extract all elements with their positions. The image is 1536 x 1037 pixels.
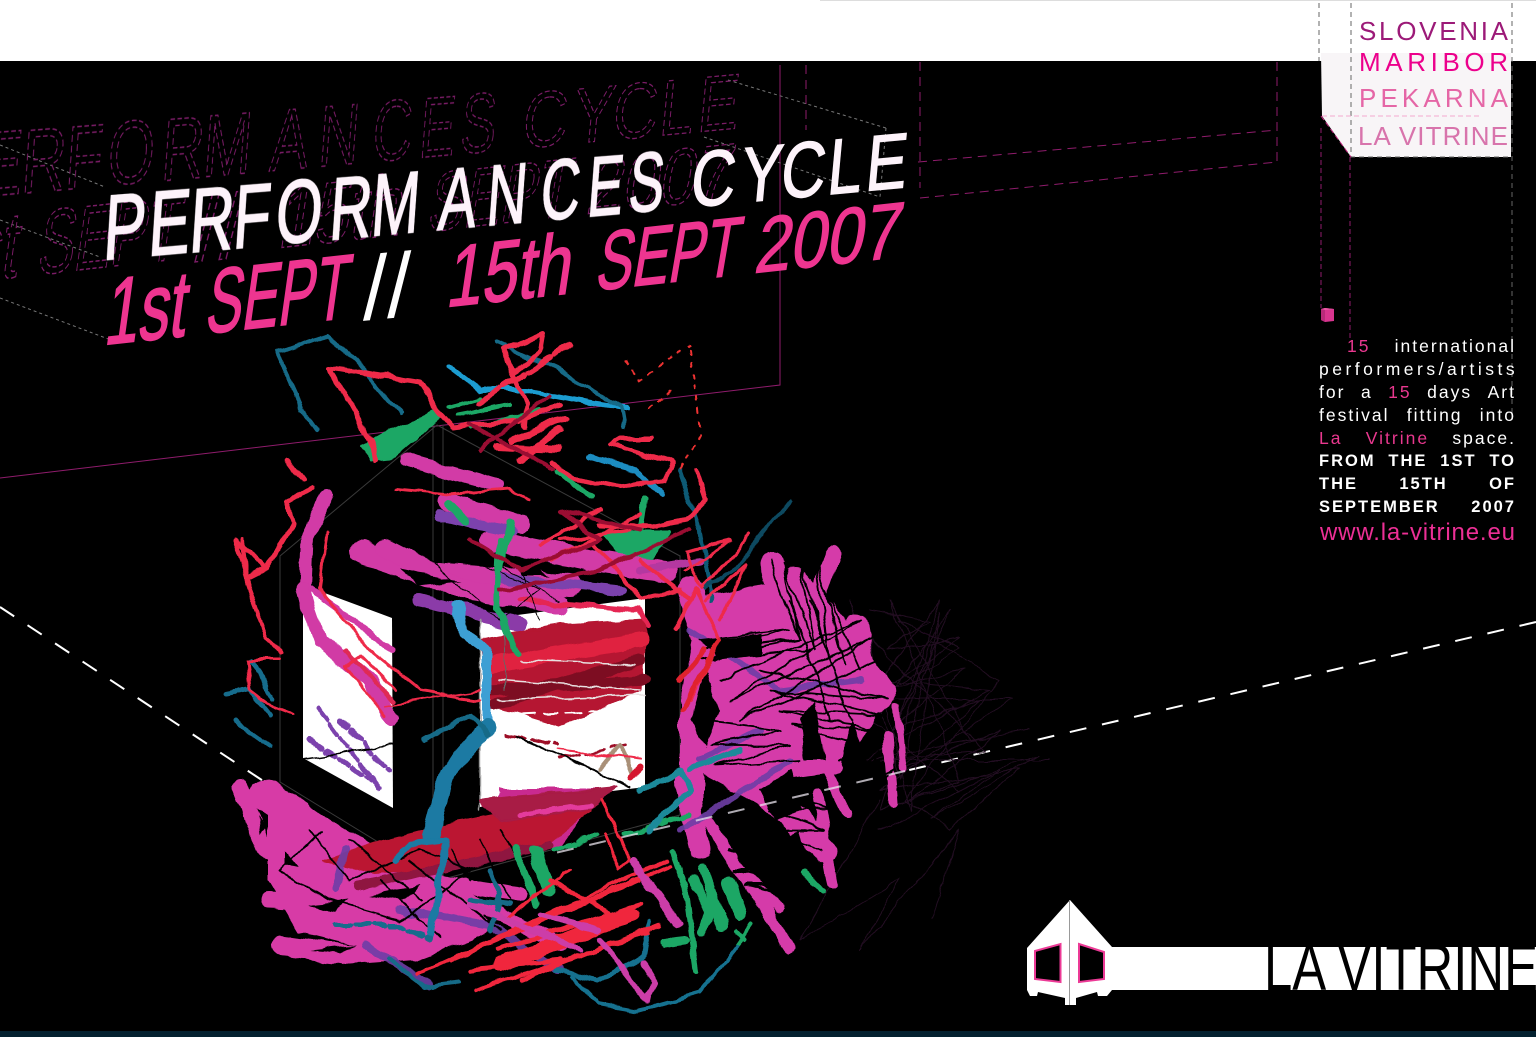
text block: festival description: international <box>1395 336 1516 356</box>
title: festival dates: 15th <box>442 215 581 326</box>
scribble: magenta and purple brush top <box>305 460 700 625</box>
text block: festival description: 15 <box>1388 382 1412 402</box>
text block: festival description: 15TH <box>1399 475 1448 493</box>
text block: festival description: fitting <box>1407 405 1463 425</box>
title: festival dates: 2007 <box>750 184 910 290</box>
text block: festival description: OF <box>1489 475 1516 493</box>
dashed line over scribble <box>555 771 905 853</box>
ghost title: outlined text behind the main title <box>0 58 744 307</box>
ghost title: outlined text behind the main title: SEPT <box>423 141 581 250</box>
title: festival dates: // <box>363 234 412 339</box>
text block: festival description <box>1319 336 1518 516</box>
scribble: black hatching over magenta <box>280 555 895 940</box>
top white band <box>0 0 1536 61</box>
text block: festival description: 1ST <box>1440 452 1477 470</box>
scribble: bright red knot bottom <box>418 800 670 990</box>
scribble: red band bottom <box>324 787 618 885</box>
title: performances cycle: PERFORMANCES <box>101 149 738 281</box>
title: festival dates: SEPT <box>591 200 749 309</box>
location panel: LA VITRINE <box>1358 121 1508 151</box>
title: festival dates <box>100 134 1340 366</box>
text block: festival description: Art <box>1488 382 1516 402</box>
icon: small pink cube <box>1321 308 1334 322</box>
text block: festival description: space. <box>1452 428 1516 448</box>
text block: festival description: THE <box>1319 475 1358 493</box>
scribble: magenta brush bottom <box>240 785 600 955</box>
title: performances cycle: CYCLE <box>687 117 912 225</box>
ghost title: outlined text behind the main title: 2007 <box>582 125 742 231</box>
text block: festival description: TO <box>1489 452 1516 470</box>
vitrine building outline <box>280 425 680 880</box>
text block: festival description: for <box>1319 382 1345 402</box>
logo house <box>1027 900 1536 1005</box>
text block: festival description: days <box>1427 382 1472 402</box>
ghost title: outlined text behind the main title: // <box>195 175 244 280</box>
location panel: PEKARNA <box>1359 83 1509 113</box>
text block: festival description: Vitrine <box>1366 428 1429 448</box>
text block: festival description: 2007 <box>1471 498 1516 516</box>
text block: festival description: 15 <box>1347 336 1370 356</box>
scribble: dark haze lines right <box>800 600 1050 950</box>
ghost title: outlined text behind the main title: CYCLE <box>519 58 744 166</box>
location panel: SLOVENIA <box>1359 16 1509 46</box>
text block: festival description: performers/artists <box>1319 359 1518 379</box>
bottom navy strip <box>0 1031 1536 1037</box>
text block: festival description: festival <box>1319 405 1389 425</box>
scribble: green strokes <box>360 398 823 970</box>
title: festival dates: 1st <box>100 251 196 366</box>
scribble: magenta loop bottom <box>470 863 679 1000</box>
text block: festival description: FROM <box>1319 452 1376 470</box>
scribble tangle <box>226 332 1050 1010</box>
dashed perspective floor lines <box>0 607 1536 800</box>
scribble: dark red tangle <box>470 395 690 590</box>
text block: festival description: SEPTEMBER <box>1319 498 1440 516</box>
text block: festival description: THE <box>1388 452 1427 470</box>
ghost title: outlined text behind the main title: SEPT <box>33 177 190 295</box>
vitrine windows <box>303 585 645 808</box>
text block: festival description: La <box>1319 428 1342 448</box>
title: festival dates: SEPT <box>201 236 358 354</box>
scribble: purple strokes <box>335 630 860 985</box>
scribble: magenta mass right <box>683 555 903 947</box>
website link text: www.la-vitrine.eu <box>1320 519 1516 546</box>
title: performances cycle <box>101 117 912 281</box>
scribble: window overlays <box>303 590 648 810</box>
text block: festival description: into <box>1480 405 1516 425</box>
scribble: red lines <box>235 332 750 760</box>
ghost title: outlined text behind the main title: 15th <box>274 156 413 267</box>
location panel <box>1318 3 1512 420</box>
text block: festival description: a <box>1361 382 1373 402</box>
scribble: blue and teal strokes <box>226 335 790 1010</box>
location panel: MARIBOR <box>1359 47 1508 77</box>
